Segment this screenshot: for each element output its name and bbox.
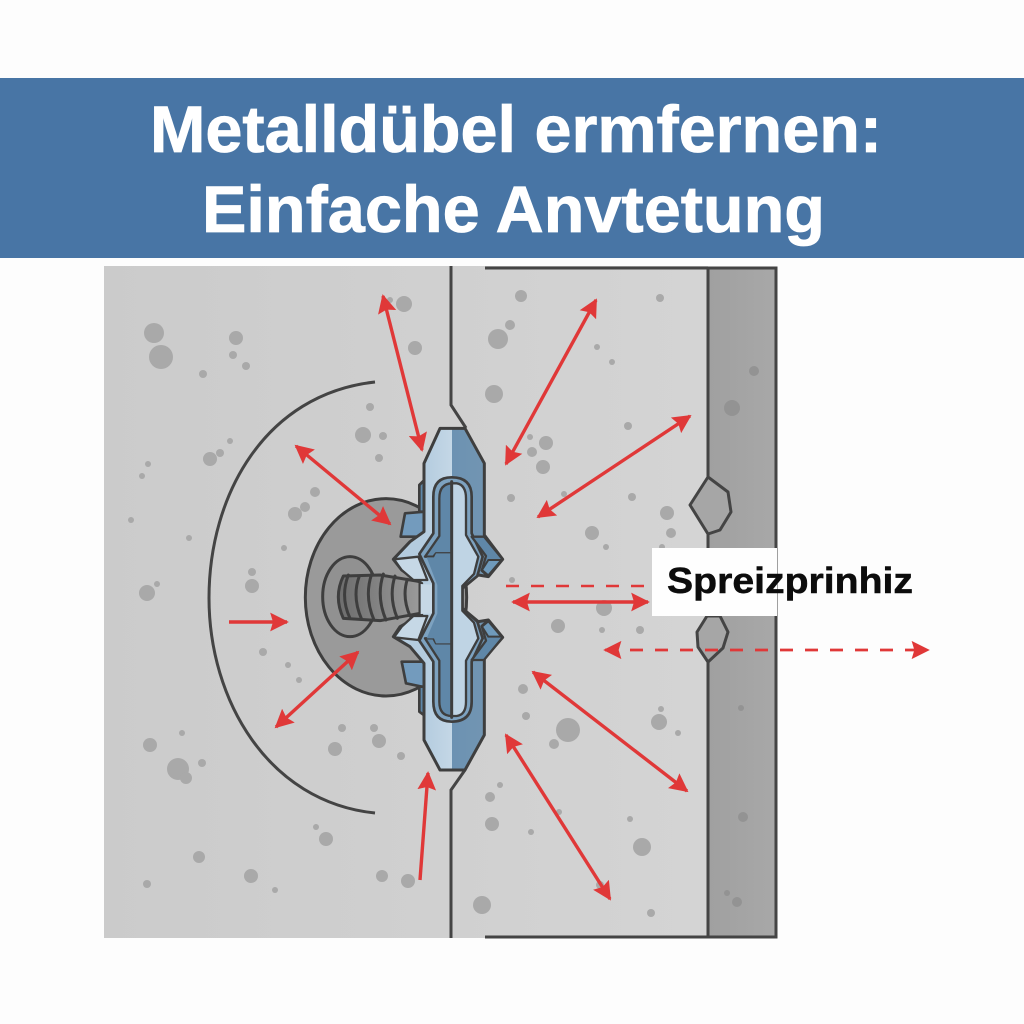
lower rear barb xyxy=(402,662,425,687)
slot left dark panel xyxy=(425,483,452,716)
lower right lobe xyxy=(472,620,503,660)
metal wall anchor with screw xyxy=(305,428,503,770)
arrow: bottom upward xyxy=(420,773,428,880)
arrows: expansion forces xyxy=(229,296,928,899)
aggregate dots xyxy=(128,290,759,917)
arrow: into arc xyxy=(229,620,287,624)
arrow: center dashed line xyxy=(506,585,648,587)
upper right lobe facet xyxy=(482,560,501,575)
screw thread xyxy=(338,574,420,621)
outer wall layer xyxy=(708,268,776,937)
anchor body xyxy=(393,428,503,770)
icon: lower crack in wall xyxy=(697,616,728,662)
arrow: upper left diagonal xyxy=(383,296,422,450)
arrow: long dashed double xyxy=(605,649,928,651)
washer xyxy=(305,499,467,696)
lower right lobe facet xyxy=(482,621,501,637)
upper rear barb xyxy=(401,512,425,537)
center line xyxy=(447,482,456,717)
concrete block xyxy=(104,266,708,938)
lower side tab xyxy=(419,687,425,716)
arrow: center double xyxy=(513,600,648,604)
arrow: lower middle xyxy=(506,735,610,899)
icon: upper crack in wall xyxy=(690,477,731,534)
title banner: Einfache Anvtetung xyxy=(202,172,825,246)
callout: Spreizprinhiz xyxy=(652,548,913,616)
arrow: lower right xyxy=(533,672,687,791)
upper right lobe xyxy=(472,537,503,577)
slot frame xyxy=(419,477,483,722)
upper left lobe xyxy=(394,557,427,580)
panel: wall cross-section xyxy=(104,266,776,938)
screw neck light section xyxy=(421,584,437,614)
callout: Spreizprinhiz: Spreizprinhiz xyxy=(667,560,913,601)
arrow: washer upper xyxy=(296,446,390,524)
slot right light panel xyxy=(452,483,478,716)
slot left center fill xyxy=(427,553,451,643)
arrow: washer lower xyxy=(276,652,358,727)
wall lines xyxy=(451,266,776,938)
arrow: upper middle xyxy=(506,300,596,464)
arrow: upper right xyxy=(538,416,690,517)
title banner xyxy=(0,78,1024,258)
upper side tab xyxy=(419,479,425,512)
lower left lobe xyxy=(394,616,427,640)
title banner: Metalldübel ermfernen: xyxy=(150,92,882,166)
washer inner ring xyxy=(323,557,377,637)
pressure arc xyxy=(209,382,375,813)
